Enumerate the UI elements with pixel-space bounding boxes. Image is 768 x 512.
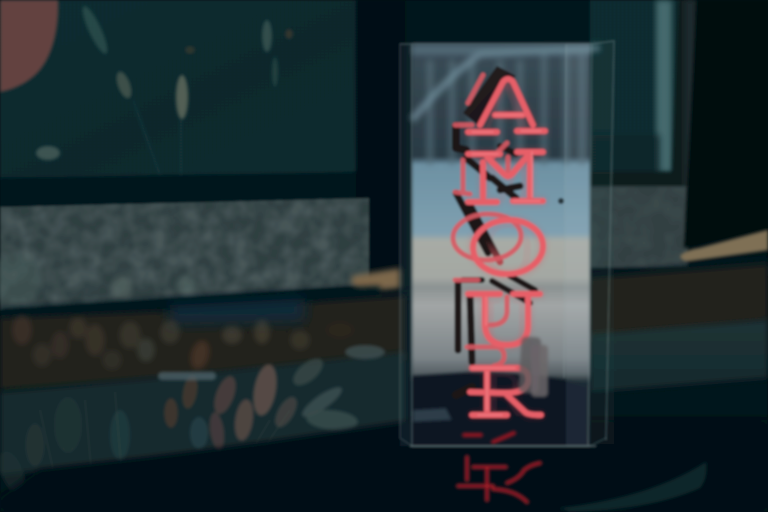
- real lettering of the sign: O: [482, 209, 534, 289]
- right window: [590, 0, 696, 190]
- left window frame: [0, 170, 372, 208]
- left lower brown ledge: [0, 296, 404, 390]
- small screw dot: [558, 198, 564, 204]
- interior view through glass: [412, 44, 590, 446]
- reflected grass seed heads: [36, 4, 293, 200]
- dark column beside window: [356, 0, 404, 272]
- left teal ledge: [0, 352, 404, 475]
- horizontal shadow band: [0, 258, 768, 320]
- reflected grass bouquet: [0, 345, 385, 512]
- left window screen: [0, 0, 358, 200]
- tube highlights: [472, 115, 541, 415]
- real lettering of the sign: M: [476, 145, 534, 218]
- neon reflection in table: [458, 433, 540, 502]
- side glass panel right: [566, 44, 590, 446]
- round black table: [332, 416, 708, 512]
- right lower brown ledge: [590, 264, 768, 340]
- glass case: [400, 41, 614, 446]
- real lettering of the sign: R: [484, 359, 527, 430]
- pink circle reflection: [0, 0, 58, 92]
- gray cylinders behind sign: [519, 337, 548, 397]
- left stone wall: [0, 198, 369, 310]
- neon sign: [452, 65, 545, 430]
- bottom dark shadow: [0, 420, 768, 512]
- black back of tubes: [456, 66, 535, 395]
- real lettering of the sign: [476, 65, 535, 430]
- beige strip right: [680, 230, 768, 261]
- front neon tubes: [468, 79, 545, 415]
- neon glow: [468, 78, 545, 415]
- real lettering of the sign: A: [480, 65, 535, 149]
- beige strip near case: [352, 268, 400, 292]
- right teal ledge: [590, 320, 768, 392]
- front side tint right: [590, 42, 614, 444]
- real lettering of the sign: U: [480, 285, 530, 361]
- blurred building behind glass: [412, 48, 600, 165]
- glass edges: [400, 41, 614, 446]
- black door: [684, 0, 768, 248]
- back neon tubes: [452, 75, 522, 392]
- right stone wall: [590, 186, 688, 268]
- dark table top behind sign: [412, 372, 588, 446]
